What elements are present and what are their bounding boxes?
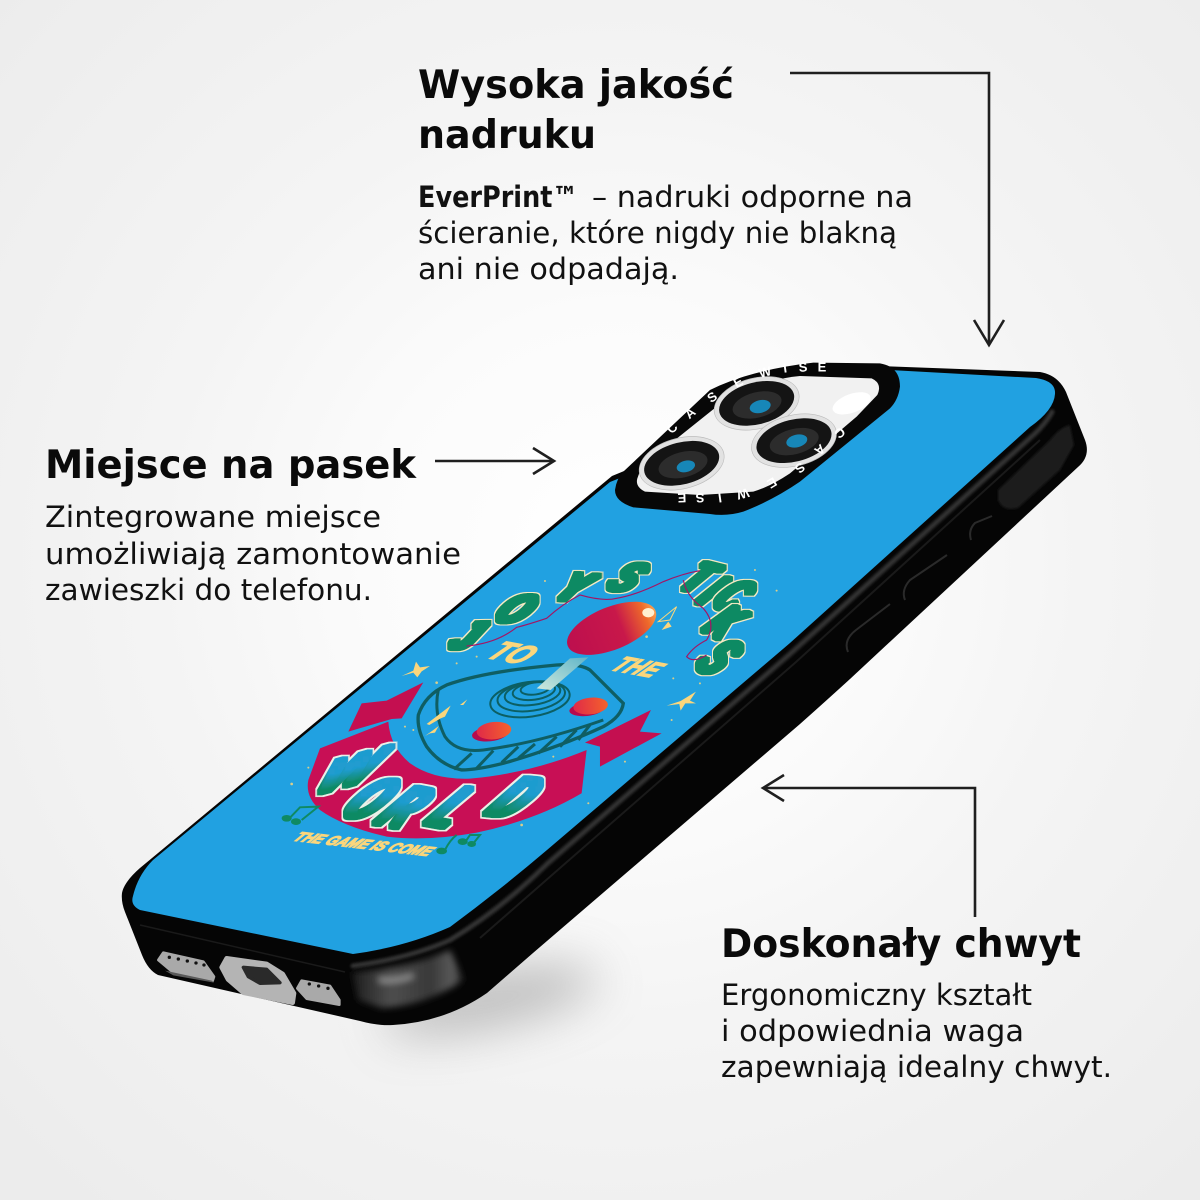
camera brand ring text: I — [717, 490, 723, 506]
arrow: print quality — [790, 73, 1004, 345]
charging port — [222, 958, 294, 1003]
camera brand ring text: C — [831, 424, 848, 442]
joystick ball — [560, 591, 664, 666]
case body — [122, 366, 1087, 1025]
camera glass — [637, 376, 879, 495]
ball highlight — [642, 608, 654, 617]
camera brand ring text — [663, 359, 848, 506]
music notes — [283, 807, 480, 853]
heading: grip: Doskonały chwyt — [721, 922, 1081, 967]
body: grip: zapewniają idealny chwyt. — [721, 1050, 1112, 1084]
TO: TO — [478, 636, 548, 670]
ribbon left tail — [348, 682, 423, 732]
camera brand ring text: E — [677, 490, 687, 506]
controller inner line — [437, 690, 603, 751]
camera brand ring text: W — [734, 485, 751, 503]
camera brand ring text: S — [695, 490, 705, 506]
body: print quality: ścieranie, które nigdy nie blakną — [418, 216, 897, 250]
side inner line — [480, 440, 1040, 938]
body: print quality: – nadruki odporne na — [592, 180, 913, 214]
body: grip — [721, 978, 1112, 1084]
JOYSTICKS lettering: S — [593, 554, 664, 600]
JOYSTICKS lettering: S — [679, 630, 759, 685]
WORLD lettering: W — [299, 734, 403, 807]
camera brand ring text: S — [798, 359, 808, 375]
JOYSTICKS lettering: J — [437, 614, 500, 657]
phone shadow — [377, 952, 603, 1048]
WORLD lettering: L — [407, 775, 501, 839]
WORLD lettering: R — [357, 775, 454, 840]
strap slot — [998, 425, 1074, 509]
joystick stick — [537, 657, 588, 690]
heading: print quality — [418, 63, 734, 158]
body: print quality: EverPrint™ — [418, 180, 578, 214]
side rim highlight — [353, 412, 1052, 966]
camera brand ring text: W — [757, 363, 774, 381]
body: strap slot: umożliwiają zamontowanie — [45, 537, 461, 571]
heading: strap slot: Miejsce na pasek — [45, 443, 417, 488]
button left — [471, 720, 512, 743]
camera brand ring text: E — [731, 373, 746, 391]
body: strap slot: Zintegrowane miejsce — [45, 500, 381, 534]
text block: grip — [721, 922, 1112, 1084]
text block: strap slot — [45, 443, 461, 607]
speaker left — [158, 953, 214, 983]
camera brand ring text: E — [818, 360, 827, 375]
WORLD lettering — [299, 734, 565, 840]
body: grip: i odpowiednia waga — [721, 1014, 1024, 1048]
printed artwork — [283, 554, 778, 859]
light string — [467, 571, 711, 660]
body: strap slot: zawieszki do telefonu. — [45, 573, 372, 607]
JOYSTICKS lettering: C — [698, 571, 771, 619]
camera brand ring text: S — [792, 459, 808, 477]
JOYSTICKS lettering: O — [481, 587, 554, 630]
controller outline — [418, 665, 623, 770]
body: strap slot — [45, 500, 461, 607]
camera brand ring text: I — [782, 360, 788, 376]
JOYSTICKS lettering: I — [684, 569, 743, 612]
side buttons — [847, 516, 992, 652]
camera frame — [615, 363, 900, 515]
ports — [158, 953, 339, 1005]
arrow: strap slot — [435, 448, 554, 474]
joystick rings — [488, 677, 572, 722]
paint specks — [290, 569, 778, 826]
lens top — [708, 368, 805, 438]
heading: print quality: Wysoka jakość — [418, 63, 734, 108]
camera module — [615, 363, 900, 515]
camera brand ring text: E — [764, 474, 779, 492]
WORLD lettering: D — [468, 766, 565, 829]
THE: THE — [604, 652, 672, 682]
controller stripes — [454, 725, 590, 769]
arrow: grip — [763, 775, 975, 917]
lens right — [746, 406, 842, 476]
JOYSTICKS lettering: K — [690, 597, 763, 647]
body: grip: Ergonomiczny kształt — [721, 978, 1032, 1012]
ribbon right tail — [585, 710, 662, 767]
WORLD lettering: O — [322, 768, 422, 829]
JOYSTICKS lettering: Y — [540, 565, 610, 609]
blue back face — [132, 370, 1055, 954]
camera brand ring text: A — [682, 404, 699, 422]
button right — [569, 696, 609, 718]
body: print quality — [418, 180, 913, 286]
phone case — [122, 366, 1087, 1025]
stars — [402, 607, 696, 736]
heading: print quality: nadruku — [418, 113, 596, 158]
tagline: THE GAME IS COME — [290, 829, 439, 859]
bottom edge line — [140, 925, 345, 972]
ribbon main — [308, 722, 587, 838]
speaker right — [297, 981, 339, 1005]
camera brand ring text: C — [663, 419, 681, 437]
corner gloss — [352, 950, 464, 1008]
body: print quality: ani nie odpadają. — [418, 252, 679, 286]
JOYSTICKS lettering — [437, 554, 771, 685]
flash — [830, 388, 874, 419]
lens left — [633, 428, 730, 498]
camera brand ring text: A — [811, 441, 828, 459]
camera brand ring text: S — [704, 388, 720, 406]
text block: print quality — [418, 63, 913, 286]
JOYSTICKS lettering: T — [665, 554, 735, 600]
